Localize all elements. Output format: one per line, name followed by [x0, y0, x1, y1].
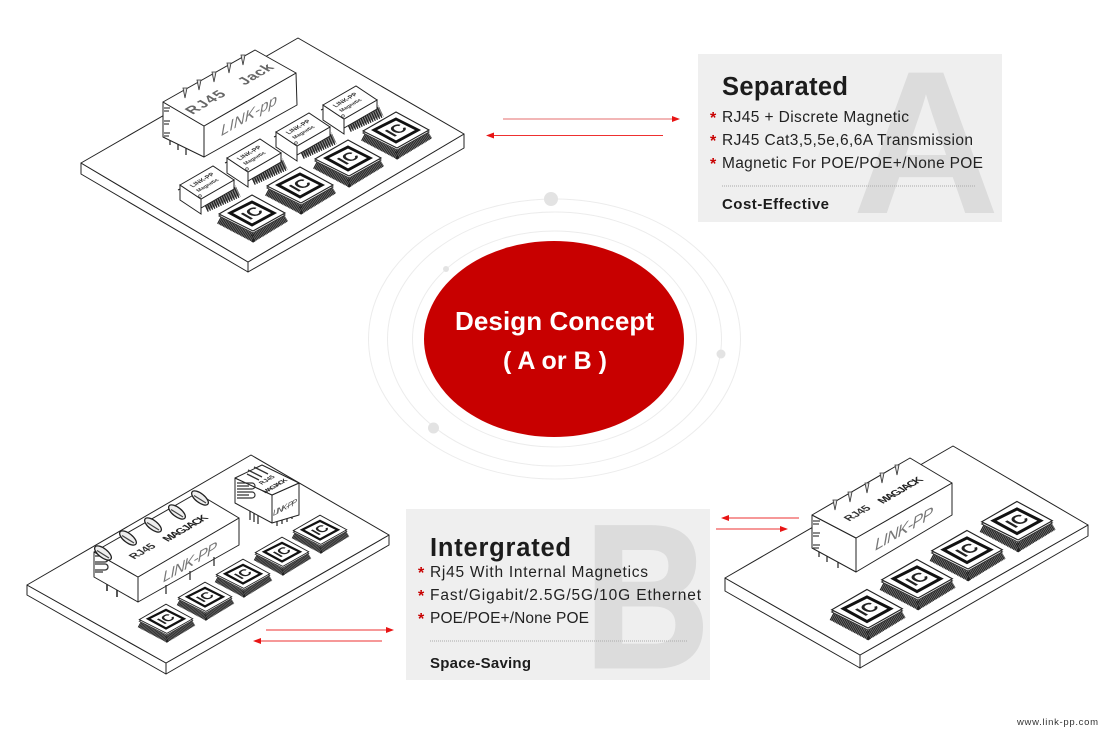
- bullet list: [418, 564, 702, 628]
- bullet list: RJ45 + Discrete Magnetic: [722, 109, 909, 126]
- discrete magnetic 4: LINK-PP: [332, 92, 360, 108]
- RJ45 jack A: Jack: [233, 61, 279, 88]
- bullet list: *: [418, 588, 425, 605]
- RJ45 MagJack right: MAGJACK: [875, 475, 927, 506]
- RJ45 MagJack right: [812, 458, 952, 572]
- IC chip C3: IC: [951, 540, 984, 559]
- central heading ellipse: [424, 241, 684, 437]
- bullet list: *: [418, 565, 425, 582]
- discrete magnetic 1: [178, 166, 238, 214]
- bullet list: [710, 109, 983, 173]
- discrete magnetic 2: LINK-PP: [236, 145, 264, 161]
- big letter B: B: [584, 484, 710, 711]
- IC chip A2: IC: [285, 176, 316, 194]
- IC chip A3: IC: [333, 149, 364, 167]
- bullet list: *: [710, 110, 717, 127]
- panel: B Intergrated: [406, 484, 710, 711]
- IC chip A2: [267, 167, 334, 210]
- circuit board B right: [725, 446, 1088, 668]
- large RJ45 MagJack: RJ45: [126, 542, 159, 561]
- arrows: board B left to panel B: [253, 627, 394, 644]
- IC chip B3: [216, 559, 271, 594]
- illustration: integrated board B left: [27, 455, 389, 674]
- website credit: www.link-pp.com: [1016, 717, 1098, 728]
- decorative rings around centre: [368, 192, 740, 479]
- summary: Space-Saving: Space-Saving: [430, 655, 531, 672]
- IC chip B3: IC: [231, 567, 256, 581]
- small RJ45 MagJack: [235, 465, 299, 526]
- bullet list: *: [710, 156, 717, 173]
- IC chip B2: [178, 582, 233, 617]
- illustration: integrated board B right: [725, 446, 1088, 668]
- discrete magnetic 4: Magnetic: [338, 98, 364, 113]
- IC chip B4: IC: [270, 545, 295, 559]
- RJ45 MagJack right: RJ45: [841, 504, 874, 523]
- heading: Intergrated: Intergrated: [430, 534, 571, 562]
- bullet list: *: [710, 133, 717, 150]
- IC chip C4: [982, 501, 1053, 547]
- RJ45 jack A: LINK-pp: [221, 91, 277, 140]
- bullet list: Fast/Gigabit/2.5G/5G/10G Ethernet: [430, 587, 702, 604]
- panel: A Separated: [698, 29, 1002, 257]
- IC chip A3: [315, 140, 382, 183]
- IC chip A4: IC: [381, 121, 412, 139]
- small RJ45 MagJack: MAGJACK: [261, 478, 290, 495]
- bullet list: *: [418, 611, 425, 628]
- discrete magnetic 3: LINK-PP: [285, 119, 313, 135]
- small RJ45 MagJack: RJ45: [258, 474, 277, 486]
- heading: A or B: ( A or B ): [503, 347, 607, 375]
- IC chip C1: IC: [851, 599, 884, 618]
- discrete magnetic 2: Magnetic: [242, 151, 268, 166]
- IC chip C2: IC: [901, 569, 934, 588]
- discrete magnetic 1: LINK-PP: [189, 172, 217, 188]
- RJ45 jack A: RJ45: [181, 88, 230, 117]
- discrete magnetic 2: [225, 139, 285, 187]
- IC chip B1: [139, 604, 194, 639]
- RJ45 MagJack right: LINK-PP: [875, 502, 933, 555]
- IC chip A1: [219, 195, 286, 238]
- IC chip B4: [255, 537, 310, 572]
- IC chip C2: [882, 559, 953, 605]
- IC chip B5: IC: [308, 523, 333, 537]
- discrete magnetic 1: Magnetic: [195, 178, 221, 193]
- IC chip A4: [363, 112, 430, 155]
- big letter A: A: [852, 29, 1000, 257]
- discrete magnetic 3: [274, 113, 334, 161]
- arrows: board A to panel A: [486, 116, 680, 138]
- small RJ45 MagJack: LINK-PP: [273, 496, 297, 518]
- heading: Design Concept: Design Concept: [455, 306, 654, 336]
- bullet list: Magnetic For POE/POE+/None POE: [722, 155, 983, 172]
- IC chip B5: [293, 515, 348, 550]
- illustration: separated board A: [81, 38, 464, 272]
- circuit board A: [81, 38, 464, 272]
- arrows: board B right to panel B: [716, 515, 799, 532]
- IC chip C1: [832, 589, 903, 635]
- IC chip B2: IC: [193, 590, 218, 604]
- circuit board B left: [27, 455, 389, 674]
- discrete magnetic 3: Magnetic: [291, 125, 317, 140]
- discrete magnetic 4: [321, 86, 381, 134]
- bullet list: POE/POE+/None POE: [430, 610, 589, 627]
- IC chip B1: IC: [154, 612, 179, 626]
- summary: Cost-Effective: Cost-Effective: [722, 196, 829, 213]
- IC chip C4: IC: [1001, 511, 1034, 530]
- large RJ45 MagJack: MAGJACK: [160, 513, 212, 544]
- large RJ45 MagJack: [92, 488, 239, 602]
- large RJ45 MagJack: LINK-PP: [163, 538, 217, 586]
- bullet list: Rj45 With Internal Magnetics: [430, 564, 648, 581]
- IC chip A1: IC: [237, 204, 268, 222]
- heading: Separated: Separated: [722, 73, 848, 101]
- RJ45 jack A: [163, 50, 297, 157]
- bullet list: RJ45 Cat3,5,5e,6,6A Transmission: [722, 132, 973, 149]
- IC chip C3: [932, 530, 1003, 576]
